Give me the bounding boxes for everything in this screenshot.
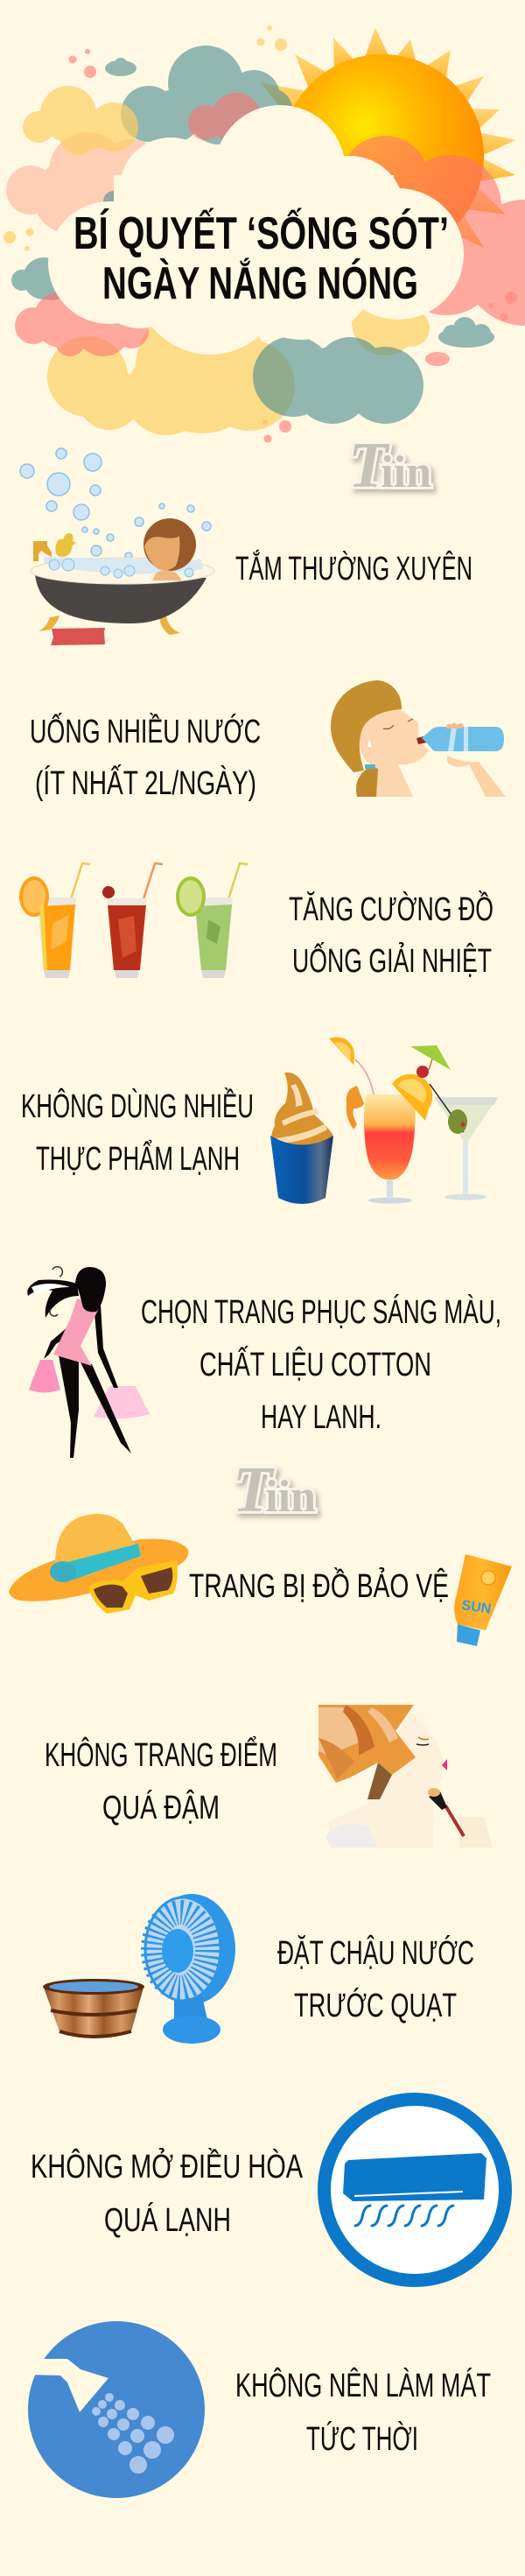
- watermark: www.tiin.vn: [235, 1524, 317, 1537]
- text: THỰC PHẨM LẠNH: [36, 1138, 240, 1178]
- text: QUÁ ĐẬM: [102, 1789, 220, 1826]
- text: KHÔNG TRANG ĐIỂM: [45, 1735, 277, 1774]
- text: TỨC THỜI: [306, 2420, 418, 2458]
- cloud: peach upper left: [6, 132, 163, 234]
- decorative dots: [4, 25, 517, 443]
- panel: tip 2 drinking water: [30, 680, 506, 802]
- panel: tip 10 no instant cooling: [26, 2321, 491, 2498]
- icon: sun: [260, 28, 515, 257]
- text: (ÍT NHẤT 2L/NGÀY): [35, 764, 256, 802]
- text: [30, 711, 261, 802]
- text: HAY LANH.: [261, 1399, 382, 1436]
- panel: tip 7 makeup: [45, 1705, 493, 1848]
- icon: red drink: [102, 863, 163, 978]
- icon: desk fan: [144, 1894, 235, 2044]
- cloud: central cream title cloud: [48, 105, 464, 355]
- title: NGÀY NẮNG NÓNG: [102, 257, 418, 309]
- panel: hero header with sun and clouds: [4, 25, 525, 443]
- icon: three juice glasses: [19, 863, 248, 978]
- cloud: teal left: [11, 191, 124, 300]
- icon: bathtub: [20, 448, 214, 645]
- text: [21, 1087, 254, 1178]
- panel: tip 5 clothing: [27, 1267, 501, 1458]
- text: TRƯỚC QUẠT: [294, 1987, 457, 2024]
- icon: shower badge: [26, 2321, 205, 2498]
- icon: wooden basin: [43, 1979, 144, 2037]
- icon: orange juice: [19, 863, 90, 978]
- cloud: yellow upper left: [23, 86, 138, 155]
- text: [235, 2366, 491, 2458]
- panel: tip 3 cold drinks: [19, 863, 494, 980]
- icon: sun hat and sunglasses: [9, 1514, 188, 1614]
- cloud: small salmon: [425, 352, 450, 366]
- text: [289, 890, 494, 980]
- text: [141, 1293, 501, 1436]
- text: KHÔNG DÙNG NHIỀU: [21, 1087, 254, 1125]
- icon: tropical cocktail: [329, 1037, 432, 1203]
- cloud: salmon right: [341, 136, 525, 326]
- watermark: www.tiin.vn: [350, 499, 431, 512]
- icon: green drink: [176, 863, 248, 978]
- cloud: salmon upper center: [188, 93, 262, 144]
- text: [45, 1735, 277, 1826]
- panel: tip 9 air conditioner: [31, 2100, 506, 2280]
- watermark: Tiin: [348, 430, 431, 502]
- icon: fashion woman with shopping bags: [27, 1267, 150, 1458]
- icon: woman drinking from bottle: [331, 680, 506, 797]
- cloud: yellow bottom: [47, 302, 295, 435]
- cloud: teal lower right: [253, 336, 424, 424]
- cloud: small teal: [105, 58, 494, 348]
- cloud: teal upper: [121, 46, 292, 144]
- panel: tip 1 bathing: [20, 430, 472, 645]
- cloud: salmon lower left: [15, 292, 149, 356]
- panel: tip 8 water basin and fan: [43, 1894, 474, 2044]
- icon: martini with olive and umbrella: [410, 1045, 498, 1200]
- title: [74, 208, 449, 309]
- icon: woman applying makeup: [318, 1705, 493, 1848]
- text: QUÁ LẠNH: [104, 2201, 231, 2239]
- icon: sunscreen tube: [454, 1554, 512, 1646]
- text: UỐNG NHIỀU NƯỚC: [30, 711, 261, 750]
- cloud: yellow lower right: [352, 289, 430, 355]
- icon: air conditioner badge: [324, 2100, 506, 2280]
- icon: sunscreen tube: SUN: [460, 1598, 492, 1617]
- panel: tip 4 cold food: [21, 1037, 498, 1204]
- icon: sunscreen tube: SPF50: [461, 1614, 486, 1626]
- text: [277, 1934, 474, 2024]
- text: CHẤT LIỆU COTTON: [200, 1345, 431, 1383]
- panel: tip 6 protection: [9, 1454, 512, 1646]
- watermark: Tiin: [233, 1454, 316, 1526]
- text: [31, 2147, 303, 2239]
- icon: ice cream cup: [270, 1073, 333, 1204]
- text: KHÔNG MỞ ĐIỀU HÒA: [31, 2147, 303, 2185]
